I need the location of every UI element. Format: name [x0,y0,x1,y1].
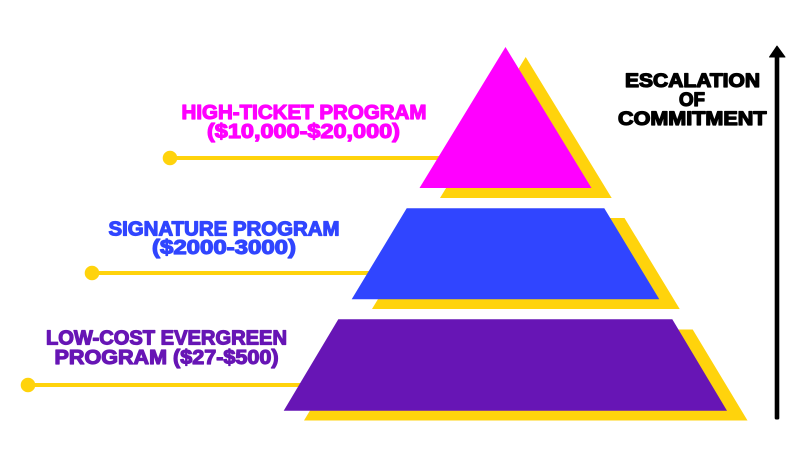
label: low-cost evergreen program: LOW-COST EVERGREEN [46,327,287,349]
label: low-cost evergreen program [46,327,287,369]
shadow: top triangle [440,57,612,198]
arrow: upward escalation [770,46,785,420]
shadow: bottom trapezoid [304,330,748,420]
heading: escalation of commitment: COMMITMENT [618,109,767,130]
label: signature program: SIGNATURE PROGRAM [108,219,340,241]
label: signature program [108,219,340,259]
heading: escalation of commitment: ESCALATION [625,71,760,92]
label: signature program: ($2000-3000) [152,237,296,259]
trapezoid: blue [352,208,659,299]
pyramid tier: high-ticket [420,47,612,198]
trapezoid: purple [284,319,727,411]
heading: escalation of commitment: OF [679,90,705,111]
label: high-ticket program: ($10,000-$20,000) [207,121,400,143]
pyramid tier: low-cost [284,319,748,420]
label: low-cost evergreen program: PROGRAM ($27-$500) [54,347,278,369]
pyramid tier: signature [352,208,680,309]
heading: escalation of commitment [618,71,767,130]
connector: low-cost tier [21,378,313,392]
triangle: magenta [420,47,592,188]
shadow: middle trapezoid [372,218,680,309]
connector: high-ticket tier [163,151,450,165]
label: high-ticket program: HIGH-TICKET PROGRAM [182,102,426,124]
label: high-ticket program [182,102,426,143]
connector: signature tier [85,266,382,280]
